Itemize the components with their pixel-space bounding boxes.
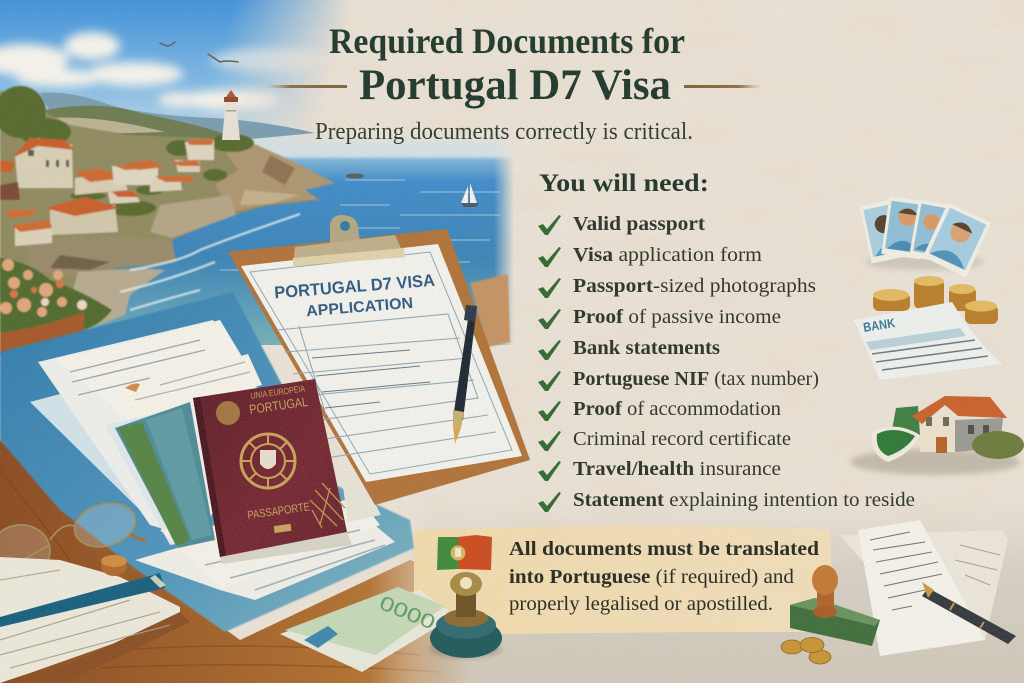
form title [274, 271, 436, 320]
item: statement: Statement explaining intention to reside [573, 489, 915, 511]
callout text: into Portuguese (if required) and [509, 566, 794, 588]
callout text: properly legalised or apostilled. [509, 593, 773, 615]
callout text: All documents must be translated [509, 538, 819, 560]
title: Required Documents for [329, 21, 685, 61]
icon: coins and bank statement [854, 276, 1002, 380]
passport cover text: PASSAPORTE [247, 501, 311, 522]
clipboard [228, 229, 530, 505]
flower pot [0, 258, 112, 354]
green stamp [790, 565, 880, 646]
passport cover text [247, 383, 311, 522]
form title: APPLICATION [306, 295, 414, 320]
coastal village and cliffs [0, 86, 335, 330]
title rule right [684, 85, 762, 88]
desk stamp [429, 572, 502, 658]
callout: translation note [414, 525, 835, 634]
banknotes [280, 587, 448, 672]
painted sky with clouds [0, 0, 360, 160]
icon: Portuguese flag [437, 535, 492, 570]
icon: coins and bank statement: BANK [862, 315, 897, 335]
subtitle: Preparing documents correctly is critical. [315, 119, 693, 145]
item: valid passport: Valid passport [573, 213, 705, 235]
icon: seagulls [160, 42, 238, 62]
checklist [538, 213, 915, 512]
tree cluster [0, 86, 254, 216]
blue folder [0, 292, 414, 632]
passport crest [216, 401, 240, 425]
passport emblem [241, 434, 295, 488]
title [329, 21, 685, 109]
checklist heading: You will need: [539, 170, 709, 197]
clipboard metal clip [293, 215, 405, 266]
fountain pen [453, 305, 477, 444]
item: NIF: Portuguese NIF (tax number) [573, 368, 819, 390]
sea with sailboat [70, 130, 514, 345]
title rule left [266, 85, 347, 88]
burgundy passport [193, 379, 352, 564]
item: bank statements: Bank statements [573, 337, 720, 359]
reading glasses [0, 497, 146, 584]
surf foam [120, 214, 300, 310]
form lines [277, 314, 496, 458]
document pages [840, 520, 1008, 656]
banknotes: 0000 [376, 592, 438, 634]
icon: house with green shield [850, 396, 1024, 475]
cork stopper [101, 555, 127, 576]
wooden ledge behind clipboard [470, 274, 510, 347]
item: passive income: Proof of passive income [573, 306, 781, 328]
item: insurance: Travel/health insurance [573, 458, 781, 480]
gold coins [781, 638, 831, 664]
form sheet [241, 244, 522, 482]
notebook with blue pen [0, 555, 190, 683]
item: visa application form: Visa application form [573, 244, 762, 266]
passport corner pattern [310, 483, 345, 528]
passport cover text: PORTUGAL [248, 394, 309, 417]
beach [70, 268, 165, 330]
wooden desk [0, 440, 500, 683]
item: criminal record: Criminal record certificate [573, 428, 791, 450]
passport cover text: UNIA EUROPEIA [250, 383, 306, 401]
icon: passport photos [860, 196, 992, 277]
stacked papers [30, 320, 395, 600]
green booklets [115, 402, 215, 548]
title: Portugal D7 Visa [359, 62, 671, 109]
item: accommodation: Proof of accommodation [573, 398, 781, 420]
lighthouse [222, 90, 240, 140]
houses [15, 138, 73, 188]
writing pen [922, 582, 1016, 644]
form title: PORTUGAL D7 VISA [274, 271, 436, 302]
distant hills [40, 92, 315, 140]
callout text [509, 538, 819, 615]
item: photographs: Passport -sized photographs [573, 275, 816, 297]
